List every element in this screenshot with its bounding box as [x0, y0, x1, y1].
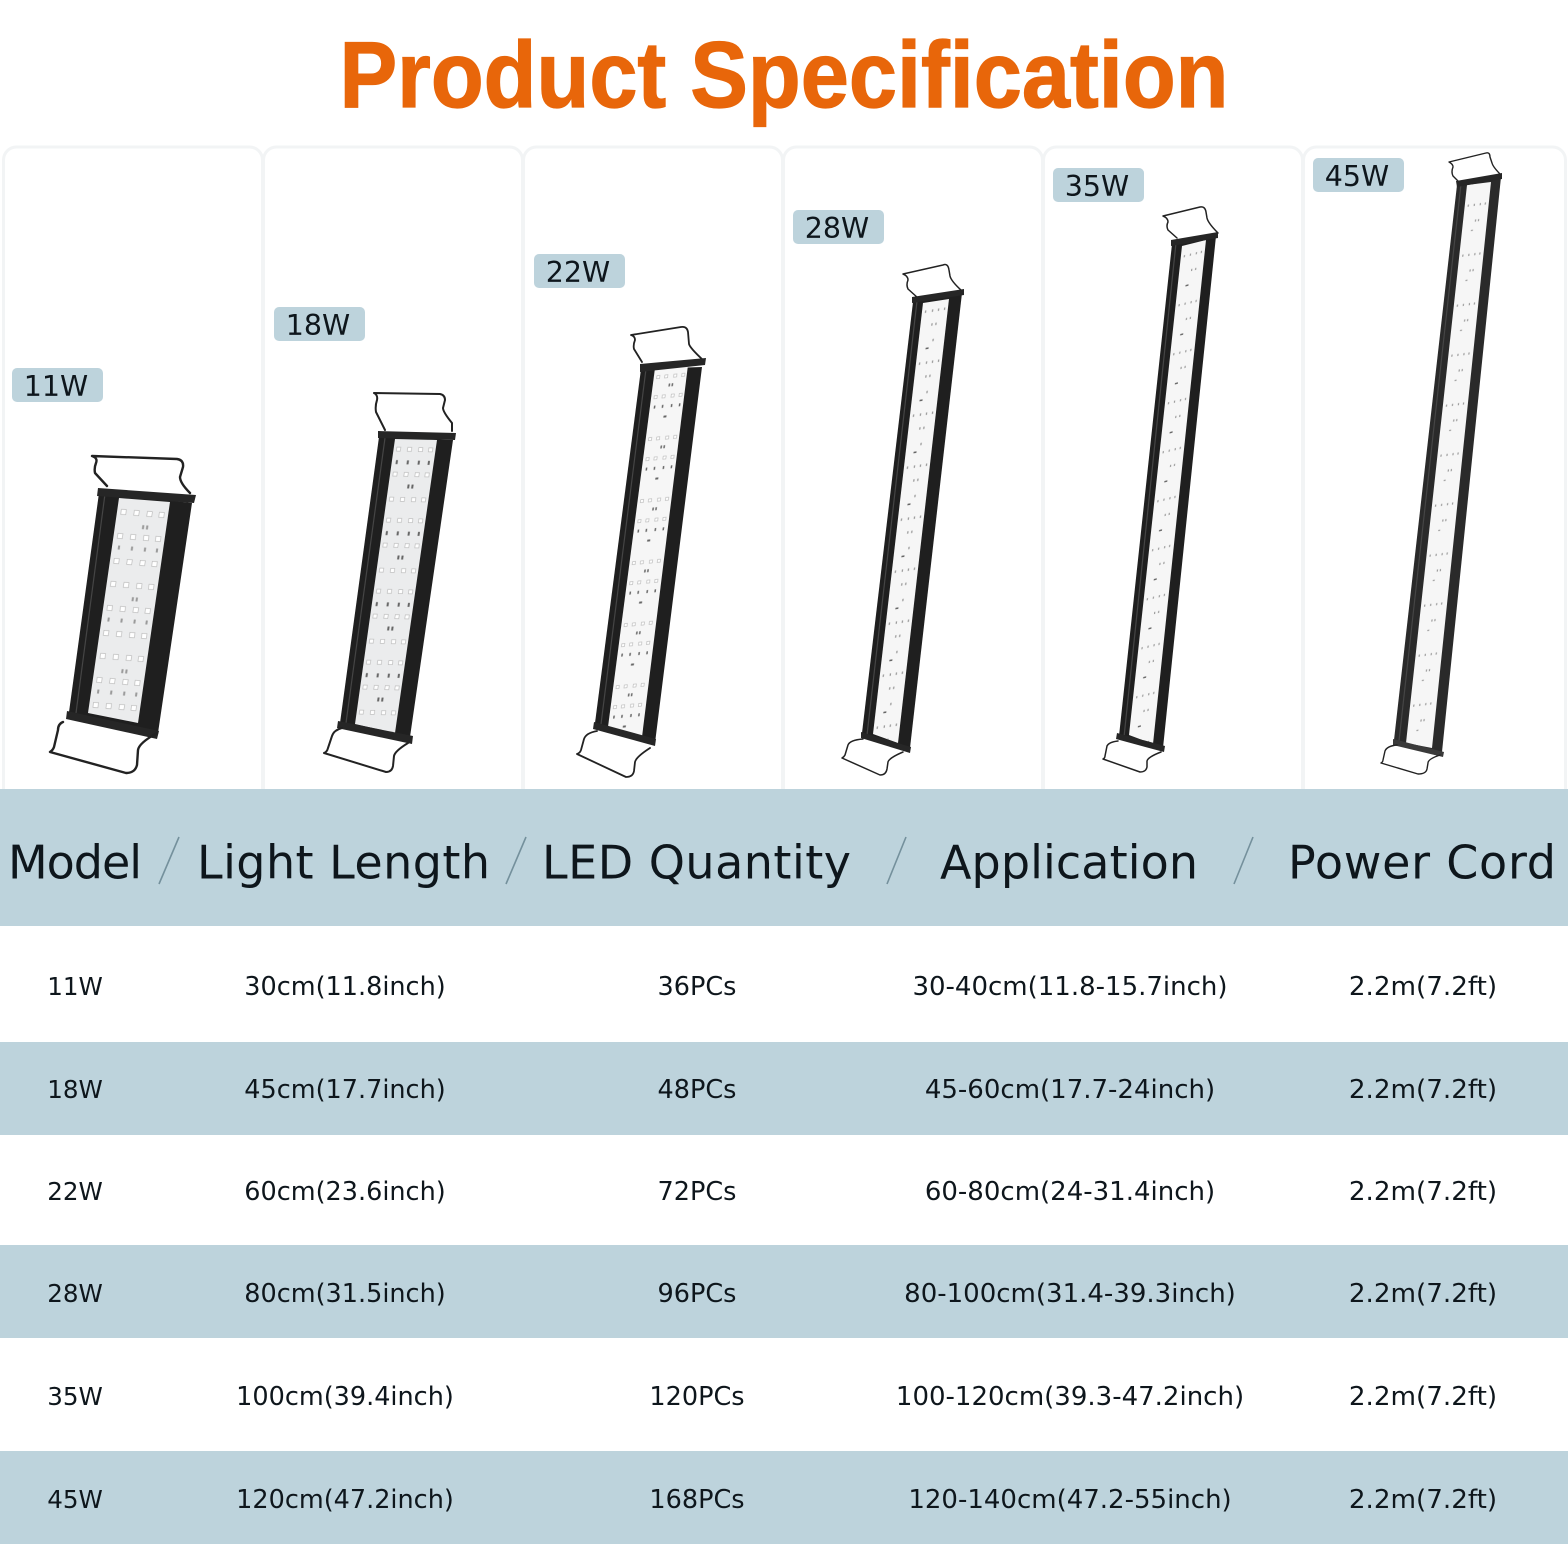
card: 45W — [1304, 147, 1566, 807]
top bracket — [903, 265, 962, 298]
bottom bracket — [842, 739, 903, 775]
header: Model: Model — [8, 836, 142, 890]
row: 45W: 120-140cm(47.2-55inch) — [908, 1485, 1232, 1515]
title: Product Specification — [340, 22, 1228, 127]
row: 22W: 72PCs — [658, 1177, 736, 1207]
row: 11W — [47, 972, 1497, 1002]
divider slash 3 — [887, 837, 906, 884]
row: 18W — [0, 1042, 1568, 1135]
row: 35W — [47, 1382, 1497, 1412]
LED panel — [873, 299, 949, 743]
LED panel — [1406, 182, 1491, 748]
header: Power Cord: Power Cord — [1288, 836, 1556, 890]
tag: 22W: 22W — [546, 256, 610, 289]
divider slash 2 — [506, 837, 526, 884]
row: 45W: 45W — [47, 1485, 103, 1514]
tag: 18W: 18W — [286, 309, 350, 342]
light: 28W — [842, 265, 964, 775]
tag: 18W — [274, 307, 365, 342]
bottom bracket — [577, 731, 650, 777]
panel: product cards — [4, 147, 1566, 807]
top bracket — [631, 327, 703, 362]
bottom end cap — [861, 732, 911, 753]
row: 22W: 60cm(23.6inch) — [244, 1177, 446, 1207]
tag: 22W — [534, 254, 625, 289]
bottom bracket — [50, 722, 157, 773]
LED panel — [608, 365, 688, 737]
header: Application: Application — [940, 836, 1198, 890]
top end cap — [97, 488, 196, 503]
tag: 35W — [1053, 168, 1144, 203]
top bracket — [1449, 153, 1501, 182]
row: 11W: 11W — [47, 972, 103, 1001]
card: 28W — [784, 147, 1042, 807]
light: 18W — [324, 393, 456, 772]
row: 35W: 35W — [47, 1382, 103, 1411]
table header — [0, 789, 1568, 926]
row: 22W — [47, 1177, 1497, 1207]
top end cap — [1171, 232, 1218, 246]
bottom end cap — [1393, 739, 1444, 757]
tag: 28W: 28W — [805, 212, 869, 245]
row: 35W: 120PCs — [649, 1382, 745, 1412]
row: 11W: 30cm(11.8inch) — [244, 972, 446, 1002]
row: 11W: 2.2m(7.2ft) — [1349, 972, 1497, 1002]
light: 35W — [1103, 207, 1218, 772]
light: 22W — [577, 327, 706, 777]
light body — [862, 293, 962, 748]
row: 22W: 2.2m(7.2ft) — [1349, 1177, 1497, 1207]
row: 35W: 2.2m(7.2ft) — [1349, 1382, 1497, 1412]
row: 22W: 60-80cm(24-31.4inch) — [925, 1177, 1215, 1207]
row: 11W: 30-40cm(11.8-15.7inch) — [912, 972, 1228, 1002]
row: 18W: 45-60cm(17.7-24inch) — [925, 1075, 1215, 1105]
light: 45W — [1381, 153, 1502, 774]
bottom bracket — [324, 728, 408, 772]
bottom end cap — [593, 722, 656, 746]
bottom end cap — [1116, 733, 1165, 752]
table rows — [0, 972, 1568, 1544]
top bracket — [1163, 207, 1218, 238]
top end cap — [640, 358, 706, 372]
row: 28W: 28W — [47, 1279, 103, 1308]
row: 35W: 100-120cm(39.3-47.2inch) — [896, 1382, 1244, 1412]
card: 11W — [4, 147, 262, 807]
top bracket — [92, 456, 190, 493]
top end cap — [378, 431, 456, 440]
tag: 45W — [1313, 158, 1404, 193]
divider slash 1 — [159, 837, 179, 884]
row: 18W: 48PCs — [658, 1075, 736, 1105]
light body — [1394, 177, 1501, 752]
divider slash 4 — [1234, 837, 1253, 884]
row: 35W: 100cm(39.4inch) — [236, 1382, 454, 1412]
bottom end cap — [66, 711, 159, 739]
row: 28W: 80cm(31.5inch) — [244, 1279, 446, 1309]
LED panel — [88, 498, 170, 723]
top end cap — [1456, 173, 1502, 187]
light body — [1119, 236, 1216, 748]
card: 18W — [264, 147, 522, 807]
row: 45W: 168PCs — [649, 1485, 745, 1515]
bottom bracket — [1381, 745, 1440, 774]
row: 18W: 18W — [47, 1075, 103, 1104]
row: 45W — [0, 1451, 1568, 1544]
header: LED Quantity: LED Quantity — [542, 836, 851, 890]
top end cap — [912, 289, 964, 303]
row: 45W: 120cm(47.2inch) — [236, 1485, 454, 1515]
tag: 11W — [12, 368, 103, 403]
bottom bracket — [1103, 741, 1161, 772]
row: 28W: 96PCs — [658, 1279, 736, 1309]
tag: 35W: 35W — [1065, 170, 1129, 203]
top bracket — [374, 393, 452, 431]
header: Light Length: Light Length — [197, 836, 490, 890]
card: 35W — [1044, 147, 1302, 807]
bottom end cap — [337, 721, 413, 744]
row: 28W — [0, 1245, 1568, 1338]
light: 11W — [50, 456, 196, 773]
row: 18W: 2.2m(7.2ft) — [1349, 1075, 1497, 1105]
LED panel — [1129, 240, 1206, 744]
light body — [340, 437, 453, 737]
row: 11W: 36PCs — [658, 972, 736, 1002]
tag: 11W: 11W — [24, 370, 88, 403]
row: 18W: 45cm(17.7inch) — [244, 1075, 446, 1105]
row: 45W: 2.2m(7.2ft) — [1349, 1485, 1497, 1515]
row: 22W: 22W — [47, 1177, 103, 1206]
row: 28W: 80-100cm(31.4-39.3inch) — [904, 1279, 1236, 1309]
tag: 45W: 45W — [1325, 160, 1389, 193]
row: 28W: 2.2m(7.2ft) — [1349, 1279, 1497, 1309]
tag: 28W — [793, 210, 884, 245]
LED panel — [355, 439, 437, 733]
card: 22W — [524, 147, 782, 807]
light body — [595, 367, 702, 743]
light body — [69, 493, 192, 733]
